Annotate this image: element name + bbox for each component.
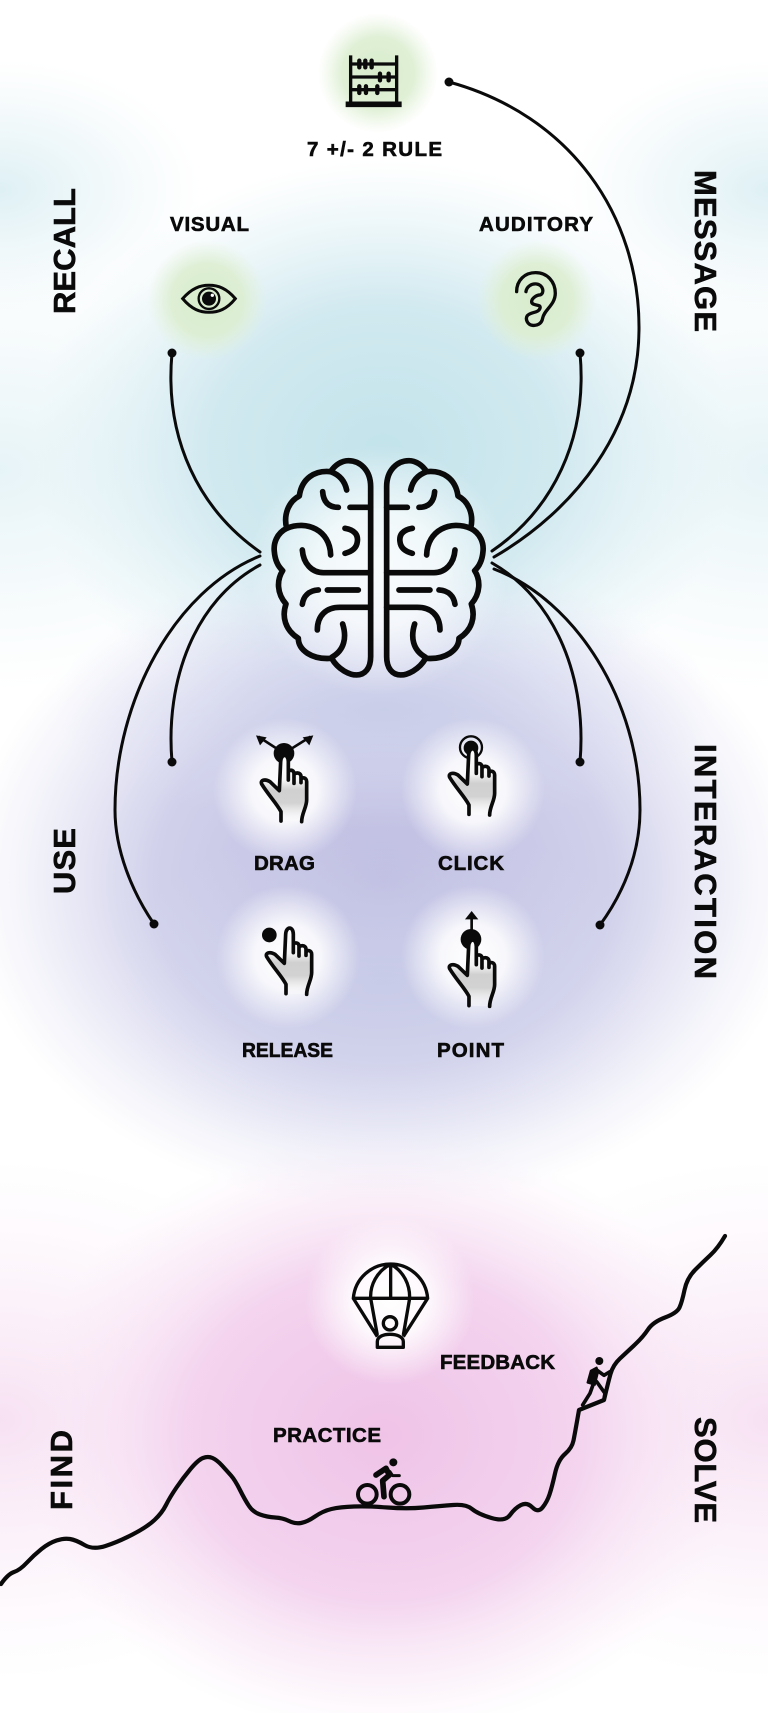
icon: click gesture [449, 736, 495, 815]
label: drag: DRAG [254, 852, 315, 875]
icon: parachute [353, 1264, 428, 1347]
connector: point [494, 569, 640, 930]
vertical label: recall: RECALL [47, 188, 82, 314]
icon: climber [583, 1357, 610, 1405]
vertical label: solve: SOLVE [688, 1417, 723, 1523]
brain left hemisphere [274, 461, 371, 675]
brain right hemisphere [387, 461, 483, 675]
connector: drag [168, 565, 260, 766]
icon: drag gesture [256, 735, 313, 822]
label: feedback: FEEDBACK [440, 1351, 555, 1374]
label: point: POINT [437, 1039, 504, 1062]
icon: brain [274, 461, 483, 675]
label: release: RELEASE [242, 1039, 333, 1062]
hand [261, 755, 307, 822]
label: click: CLICK [438, 852, 504, 875]
label: 7 +/- 2 rule: 7 +/- 2 RULE [307, 138, 442, 161]
connector: click [492, 563, 584, 766]
connector: visual [168, 348, 260, 552]
connector: release [115, 556, 260, 928]
connector: auditory [492, 348, 584, 551]
icon: release gesture [262, 928, 312, 994]
label: visual: VISUAL [170, 213, 249, 236]
vertical label: find: FIND [44, 1430, 79, 1510]
mountain line [1, 1236, 725, 1584]
icon: ear [517, 273, 555, 325]
icon: abacus [346, 55, 402, 104]
icon: point gesture [449, 911, 495, 1006]
icon: cyclist [358, 1458, 409, 1504]
icon: eye [183, 285, 235, 312]
label: auditory: AUDITORY [479, 213, 593, 236]
label: practice: PRACTICE [273, 1424, 381, 1447]
vertical label: interaction: INTERACTION [688, 744, 723, 979]
vertical label: use: USE [47, 828, 82, 894]
vertical label: message: MESSAGE [688, 170, 723, 332]
connector lines to brain [115, 78, 640, 930]
connector: 7 +/- 2 rule [444, 78, 639, 557]
